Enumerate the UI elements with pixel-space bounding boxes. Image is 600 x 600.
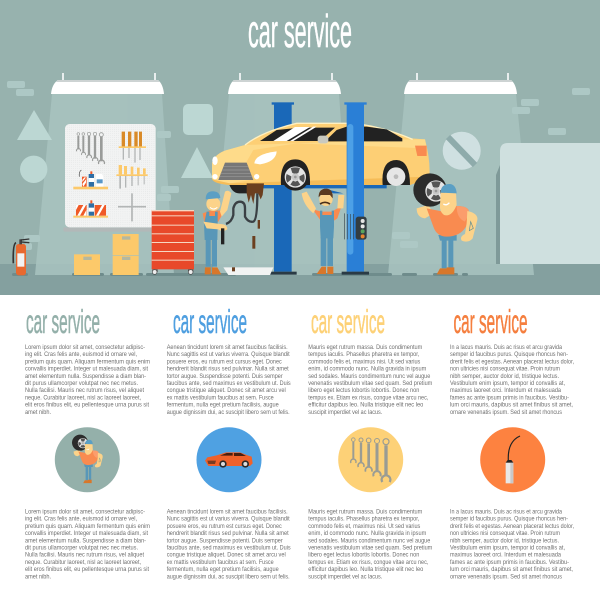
oil bottles shelf — [73, 170, 108, 189]
text block: column 1 top: dit purus ullamcorper volutpat nec nec metus. — [25, 380, 138, 387]
text block: column 2 bottom: augue dignissim dui, ac suscipit libero sem ut felis. — [167, 573, 290, 580]
moustached mechanic — [302, 189, 344, 274]
text block: column 4 top: semper id faucibus purus. Quisque rhoncus hen- — [450, 351, 568, 358]
text block: column 2 bottom: congue tristique aliquet. Donec sit amet arcu vel — [167, 552, 286, 559]
text block: column 3 top: sed sodales. Mauris condimentum nunc vel augue — [308, 373, 431, 380]
text block: column 3 top: tempus ex. Etiam ex risus, congue vitae arcu nec, — [308, 394, 428, 401]
wrenches — [76, 132, 104, 164]
text block: column 1 bottom: amet nibh. — [25, 573, 51, 580]
text block: column 1 bottom: Lorem ipsum dolor sit amet, consectetur adipisc- — [25, 508, 145, 516]
text block: column 4 top: non ultricies nisi consequat vitae. Proin rutrum — [450, 366, 560, 373]
icon: orange car in blue circle — [196, 427, 262, 492]
light cones — [35, 94, 534, 275]
text block: column 3 top: Mauris eget rutrum massa. Duis condimentum — [308, 344, 423, 351]
text block: column 1 top: amet nibh. — [25, 409, 51, 416]
text block: column 4 top — [450, 344, 574, 416]
wall bricks — [7, 81, 590, 250]
drain tray — [223, 267, 273, 275]
mechanic with hose — [203, 191, 257, 274]
screwdrivers yellow — [116, 165, 148, 189]
text: car service — [311, 303, 385, 340]
text block: column 2 bottom: fermentum, nulla eget pretium facilisis, augue — [167, 566, 279, 573]
text block: column 4 top: lum orci mauris, dapibus sit amet finibus sit amet, — [450, 402, 573, 409]
text block: column 1 top: elit eros finibus elit, eu pellentesque urna purus sit — [25, 402, 149, 409]
text block: column 2 bottom: faucibus ante, sed maximus ex vestibulum ut. Duis — [167, 544, 291, 552]
text block: column 2 top: faucibus ante, sed maximus ex vestibulum ut. Duis — [167, 380, 291, 387]
text block: column 4 top: nibh semper, auctor dolor id, tristique lectus. — [450, 373, 559, 380]
text block: column 2 bottom — [167, 508, 291, 580]
text block: column 3 bottom: Mauris eget rutrum massa. Duis condimentum — [308, 508, 423, 516]
floor shadows — [12, 273, 468, 276]
text block: column 1 bottom: elit eros finibus elit, eu pellentesque urna purus sit — [25, 566, 149, 573]
text block: column 4 bottom: ornare venenatis ipsum. Sed sit amet rhoncus — [450, 573, 563, 580]
text block: column 4 bottom: fames ac ante ipsum primis in faucibus. Vestibu- — [450, 559, 569, 566]
text block: column 2 bottom: tortor augue. Suspendisse potenti. Duis semper — [167, 537, 283, 544]
control panel — [345, 213, 367, 240]
text block: column 2 bottom: Nunc sagittis est ut varius viverra. Quisque blandit — [167, 516, 290, 523]
text block: column 2 bottom: Aenean tincidunt lorem sit amet faucibus facilisis. — [167, 508, 288, 516]
text block: column 3 top: enim, id commodo nunc. Nulla gravida in ipsum — [308, 366, 427, 373]
text block: column 2 top: Aenean tincidunt lorem sit amet faucibus facilisis. — [167, 344, 288, 351]
text block: column 1 top: Lorem ipsum dolor sit amet, consectetur adipisc- — [25, 344, 145, 351]
text block: column 4 bottom: Vestibulum enim ipsum, tempor id convallis at, — [450, 544, 565, 552]
text block: column 2 top: congue tristique aliquet. Donec sit amet arcu vel — [167, 387, 286, 394]
text block: column 1 bottom: neque. Curabitur laoreet, nisl ac laoreet laoreet, — [25, 559, 141, 566]
text block: column 3 bottom: enim, id commodo nunc. Nulla gravida in ipsum — [308, 530, 427, 537]
panel: garage scene — [0, 0, 600, 295]
fire extinguisher — [13, 239, 29, 275]
panel: garage scene: car service — [248, 5, 352, 57]
text block: column 4 bottom: nibh semper, auctor dolor id, tristique lectus. — [450, 537, 559, 544]
red tool cabinet — [152, 210, 194, 274]
text block: column 2 top: posuere eros, eu rutrum est cursus eget. Donec — [167, 358, 282, 365]
text block: column 2 top: Nunc sagittis est ut varius viverra. Quisque blandit — [167, 351, 290, 358]
text block: column 3 top: efficitur dapibus leo. Nulla tristique elit nec leo — [308, 402, 424, 409]
text block: column 1 bottom: convallis imperdiet. Integer ut malesuada diam, sit — [25, 530, 148, 537]
text block: column 3 bottom — [308, 508, 433, 580]
text block: column 4 top: Vestibulum enim ipsum, tempor id convallis at, — [450, 380, 565, 387]
icon: mechanic in teal circle — [55, 427, 120, 492]
text block: column 2 top: ex mattis vestibulum faucibus at sem. Fusce — [167, 394, 274, 401]
ceiling lamps — [51, 73, 517, 94]
oil drips — [232, 220, 260, 271]
wall shapes — [17, 104, 213, 183]
text block: column 3 bottom: tempus iaculis. Phasellus pharetra ex tempor, — [308, 516, 419, 523]
text block: column 4 bottom: drerit felis et egestas. Aenean placerat lectus dolor, — [450, 523, 574, 530]
roller door — [496, 143, 600, 264]
text block: column 3 top: commodo felis et, maximus nisi. Ut sed varius — [308, 358, 421, 365]
text block: column 2 top: fermentum, nulla eget pretium facilisis, augue — [167, 402, 279, 409]
text block: column 1 top: convallis imperdiet. Integer ut malesuada diam, sit — [25, 366, 148, 373]
text block: column 3 top: libero eget lectus lobortis lobortis. Donec non — [308, 387, 420, 394]
text block: column 2 bottom: hendrerit blandit risus sed pulvinar. Nulla sit amet — [167, 530, 289, 537]
text block: column 2 top: augue dignissim dui, ac suscipit libero sem ut felis. — [167, 409, 290, 416]
text block: column 3 top: suscipit imperdiet vel ac lacus. — [308, 409, 382, 416]
screwdrivers orange — [119, 132, 146, 163]
no-entry sign — [443, 132, 481, 170]
text block: column 2 top: hendrerit blandit risus sed pulvinar. Nulla sit amet — [167, 366, 289, 373]
wall background — [0, 0, 600, 295]
car — [212, 123, 430, 193]
text block: column 1 top: pretium quis quam. Aliquam fermentum quis enim — [25, 358, 150, 365]
text block: column 4 top: ornare venenatis ipsum. Sed sit amet rhoncus — [450, 409, 563, 416]
cross wrench — [118, 193, 146, 221]
text block: column 4 bottom: In a lacus mauris. Duis ac risus et arcu gravida — [450, 508, 562, 516]
text block: column 3 bottom: sed sodales. Mauris condimentum nunc vel augue — [308, 537, 431, 544]
icon: wrenches in yellow circle — [338, 427, 403, 492]
text block: column 3 top — [308, 344, 433, 416]
text block: column 4 top: fames ac ante ipsum primis in faucibus. Vestibu- — [450, 394, 569, 401]
left lift post — [270, 102, 297, 275]
mechanic carrying tire — [413, 173, 477, 274]
text block: column 3 bottom: tempus ex. Etiam ex risus, congue vitae arcu nec, — [308, 559, 428, 566]
text block: column 2 bottom: posuere eros, eu rutrum est cursus eget. Donec — [167, 523, 282, 530]
cardboard boxes — [74, 234, 139, 275]
text block: column 4 bottom — [450, 508, 574, 580]
right lift post — [342, 102, 369, 275]
text block: column 3 bottom: venenatis vestibulum vitae sed quam. Sed pretium — [308, 544, 433, 552]
text: car service — [173, 303, 247, 340]
text block: column 4 bottom: lum orci mauris, dapibus sit amet finibus sit amet, — [450, 566, 573, 573]
text block: column 1 bottom: dit purus ullamcorper volutpat nec nec metus. — [25, 544, 138, 552]
text block: column 1 top — [25, 344, 150, 416]
text block: column 4 top: drerit felis et egestas. Aenean placerat lectus dolor, — [450, 358, 574, 365]
text block: column 1 bottom: ing elit. Cras felis ante, euismod id ornare vel, — [25, 516, 137, 523]
text block: column 4 top: maximus laoreet orci. Interdum et malesuada — [450, 387, 561, 394]
pegboard — [63, 124, 157, 232]
text block: column 1 top: ing elit. Cras felis ante, euismod id ornare vel, — [25, 351, 137, 358]
text block: column 4 top: In a lacus mauris. Duis ac risus et arcu gravida — [450, 344, 562, 351]
paint cans shelf — [73, 200, 108, 218]
text block: column 2 top: tortor augue. Suspendisse potenti. Duis semper — [167, 373, 283, 380]
text block: column 1 bottom: amet elementum nulla. Suspendisse a diam blan- — [25, 537, 146, 544]
text block: column 3 bottom: suscipit imperdiet vel ac lacus. — [308, 573, 382, 580]
text block: column 3 bottom: efficitur dapibus leo. Nulla tristique elit nec leo — [308, 566, 424, 573]
text block: column 1 bottom: Nulla facilisi. Mauris nec rutrum risus, vel aliquet — [25, 552, 144, 559]
text block: column 1 top: Nulla facilisi. Mauris nec rutrum risus, vel aliquet — [25, 387, 144, 394]
floor — [0, 264, 600, 295]
text block: column 3 top: tempus iaculis. Phasellus pharetra ex tempor, — [308, 351, 419, 358]
icon: oil bottle in orange circle — [480, 427, 545, 492]
text block: column 1 bottom — [25, 508, 150, 580]
text: car service — [26, 303, 100, 340]
text block: column 1 top: amet elementum nulla. Suspendisse a diam blan- — [25, 373, 146, 380]
text block: column 4 bottom: non ultricies nisi consequat vitae. Proin rutrum — [450, 530, 560, 537]
text block: column 3 bottom: commodo felis et, maximus nisi. Ut sed varius — [308, 523, 421, 530]
text block: column 2 top — [167, 344, 291, 416]
text block: column 2 bottom: ex mattis vestibulum faucibus at sem. Fusce — [167, 559, 274, 566]
oil stream — [247, 183, 264, 204]
text block: column 1 top: neque. Curabitur laoreet, nisl ac laoreet laoreet, — [25, 394, 141, 401]
text block: column 3 top: venenatis vestibulum vitae sed quam. Sed pretium — [308, 380, 433, 387]
text block: column 4 bottom: semper id faucibus purus. Quisque rhoncus hen- — [450, 516, 568, 523]
text block: column 1 bottom: pretium quis quam. Aliquam fermentum quis enim — [25, 523, 150, 530]
text block: column 3 bottom: libero eget lectus lobortis lobortis. Donec non — [308, 552, 420, 559]
text block: column 4 bottom: maximus laoreet orci. Interdum et malesuada — [450, 552, 561, 559]
